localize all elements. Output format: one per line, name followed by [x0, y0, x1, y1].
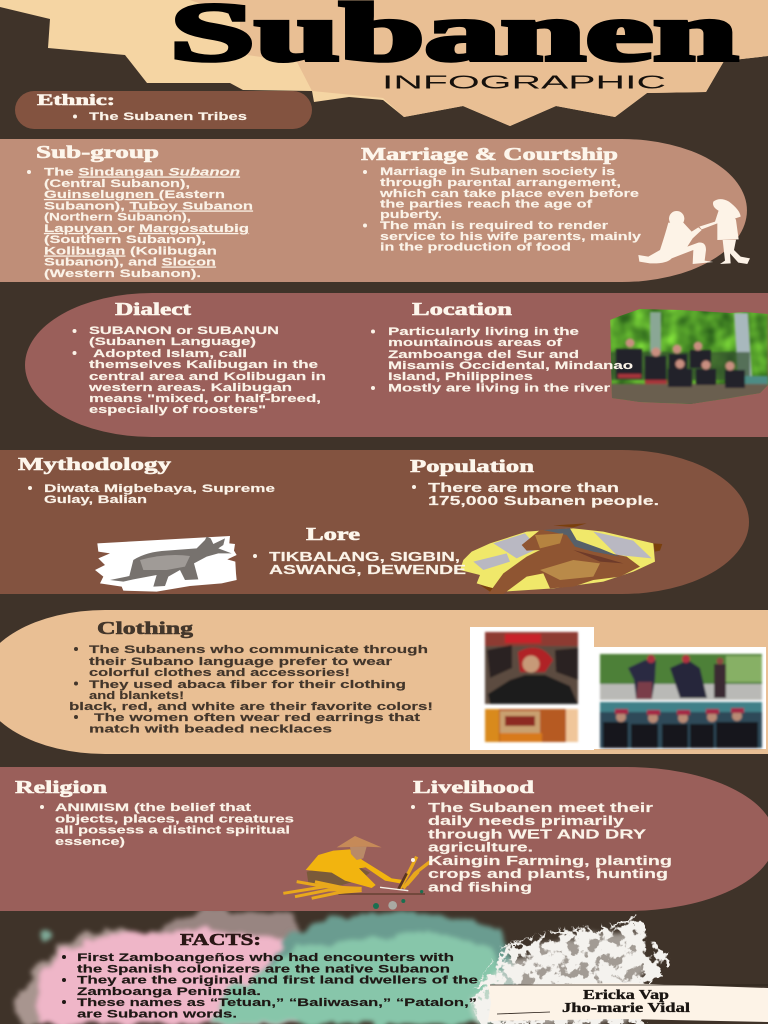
dialect text: especially of roosters" [89, 404, 266, 416]
dialect text: western areas. Kalibugan [87, 382, 292, 394]
icon: kneeling couple silhouette [638, 199, 750, 264]
sub-group text: (Western Subanon). [44, 268, 201, 280]
sub-group text: (Northern Subanon), [44, 212, 191, 224]
pink paint splash [12, 908, 300, 1024]
clothing text: match with beaded necklaces [89, 724, 332, 736]
sub-group text: Subanon), Tuboy Subanon [44, 200, 253, 212]
heading: facts: FACTS: [180, 930, 261, 949]
livelihood text: through WET AND DRY [428, 826, 646, 842]
location text: Mostly are living in the river [388, 382, 611, 394]
marriage text [363, 166, 641, 254]
marriage text: The man is required to render [380, 220, 609, 232]
lore text [253, 549, 466, 577]
livelihood text: Kaingin Farming, planting [428, 853, 672, 868]
marriage text: Marriage in Subanen society is [380, 166, 615, 178]
sub-group text: Kolibugan (Kolibugan [44, 246, 217, 258]
religion text [40, 802, 294, 848]
sub-group text: Subanon), and Slocon [44, 256, 216, 268]
facts text: the Spanish colonizers are the native Subanon [77, 964, 450, 976]
dialect text: means "mixed, or half-breed, [89, 393, 321, 405]
lore text: ASWANG, DEWENDE [269, 562, 466, 577]
photo: woven textile [485, 709, 578, 742]
heading: clothing: Clothing [97, 618, 193, 638]
location text [371, 326, 634, 394]
clothing text: their Subano language prefer to wear [89, 656, 393, 668]
heading: livelihood: Livelihood [413, 777, 534, 797]
location text: Particularly living in the [388, 326, 579, 338]
mythology text: Gulay, Balian [44, 494, 147, 506]
panel: sub-group and marriage [0, 139, 750, 282]
sub-group text: (Southern Subanon), [44, 234, 206, 246]
marriage text: service to his wife parents, mainly [380, 231, 641, 243]
location photo: people at waterfall [610, 305, 768, 405]
header mountains [0, 0, 768, 126]
mythology text: Diwata Migbebaya, Supreme [44, 483, 275, 495]
livelihood text: crops and plants, hunting [428, 866, 668, 881]
location text: Misamis Occidental, Mindanao [388, 360, 634, 372]
heading: mythology: Mythodology [18, 454, 171, 474]
marriage text: the parties reach the age of [380, 198, 593, 210]
facts text [62, 952, 478, 1020]
location text: Zamboanga del Sur and [388, 349, 579, 361]
dialect text: (Subanen Language) [89, 336, 257, 348]
green paint splash [212, 910, 520, 1024]
facts text: They are the original and first land dwellers of the [77, 974, 478, 986]
credits box: Ericka Vap [583, 987, 669, 1002]
marriage text: in the production of food [380, 242, 571, 254]
clothing photo frame [470, 627, 766, 750]
marriage text: puberty. [380, 209, 442, 221]
sub-group text: (Central Subanon), [44, 178, 190, 190]
clothing text: colorful clothes and accessories! [89, 667, 350, 679]
heading: population: Population [410, 456, 534, 476]
illustration: tikbalang horse [460, 523, 662, 594]
panel: ethnic [15, 91, 312, 129]
location text: mountainous areas of [388, 337, 563, 349]
panel: religion and livelihood [0, 767, 768, 911]
heading: location: Location [412, 299, 512, 319]
livelihood text [411, 800, 672, 894]
subtitle: INFOGRAPHIC [382, 72, 666, 92]
panel: dialect and location [25, 293, 768, 437]
mythology text [28, 483, 275, 506]
photo: dancer in traditional dress [485, 632, 578, 704]
photo: three dancers outdoors [600, 654, 762, 700]
white paint splash [470, 915, 672, 1024]
credits box: Jho-marie Vidal [562, 1000, 690, 1015]
icon: rice farmer [283, 836, 430, 910]
population text: 175,000 Subanen people. [428, 493, 659, 508]
panel: facts splash [12, 908, 672, 1024]
dialect text [72, 325, 326, 416]
dialect text: Adopted Islam, call [93, 348, 247, 360]
clothing text: black, red, and white are their favorite colors! [69, 701, 433, 713]
clothing text [69, 644, 433, 736]
heading: dialect: Dialect [115, 299, 191, 319]
dialect text: SUBANON or SUBANUN [89, 325, 279, 337]
sub-group text: Lapuyan or Margosatubig [44, 223, 249, 235]
sub-group text: Guinselugnen (Eastern [44, 189, 225, 201]
location text: Island, Philippines [388, 371, 533, 383]
livelihood text: and fishing [428, 880, 532, 894]
heading: sub-group: Sub-group [36, 142, 159, 162]
heading: marriage and courtship: Marriage & Courtship [361, 144, 618, 164]
population text [412, 480, 659, 508]
marriage text: through parental arrangement, [380, 177, 621, 189]
livelihood text: agriculture. [428, 840, 533, 854]
religion text: essence) [55, 836, 126, 848]
panel: clothing [0, 610, 768, 754]
religion text: ANIMISM (the belief that [55, 802, 252, 814]
clothing text: They used abaca fiber for their clothing [89, 679, 406, 691]
marriage text: which can take place even before [378, 188, 639, 200]
facts text: are Subanon words. [77, 1008, 237, 1020]
sub-group text [27, 166, 253, 280]
facts text: First Zamboangeños who had encounters with [77, 952, 454, 964]
heading: ethnic: Ethnic: [37, 92, 115, 109]
facts text: These names as “Tetuan,” “Baliwasan,” “Patalon,” [77, 997, 477, 1009]
facts text: Zamboanga Peninsula. [77, 986, 261, 998]
clothing text: The Subanens who communicate through [89, 644, 428, 656]
credits box [488, 983, 768, 1022]
clothing text: and blankets! [89, 690, 184, 702]
livelihood text: daily needs primarily [428, 813, 625, 828]
dialect text: themselves Kalibugan in the [89, 359, 318, 371]
dialect text: central area and Kolibugan in [89, 371, 326, 383]
ethnic text: The Subanen Tribes [89, 111, 247, 123]
population text: There are more than [428, 480, 619, 495]
livelihood text: The Subanen meet their [428, 800, 653, 815]
heading: religion: Religion [15, 777, 107, 797]
clothing text: The women often wear red earrings that [94, 712, 421, 724]
panel: mythology, population and lore [0, 450, 749, 594]
sub-group text: The Sindangan Subanon [44, 166, 241, 178]
heading: lore: Lore [306, 524, 360, 544]
lore text: TIKBALANG, SIGBIN, [269, 549, 460, 564]
illustration: sigbin creature [95, 536, 237, 592]
group of people [616, 349, 745, 388]
religion text: objects, places, and creatures [55, 814, 294, 826]
photo: group of women with bowls [600, 702, 762, 748]
religion text: all possess a distinct spiritual [55, 824, 290, 836]
